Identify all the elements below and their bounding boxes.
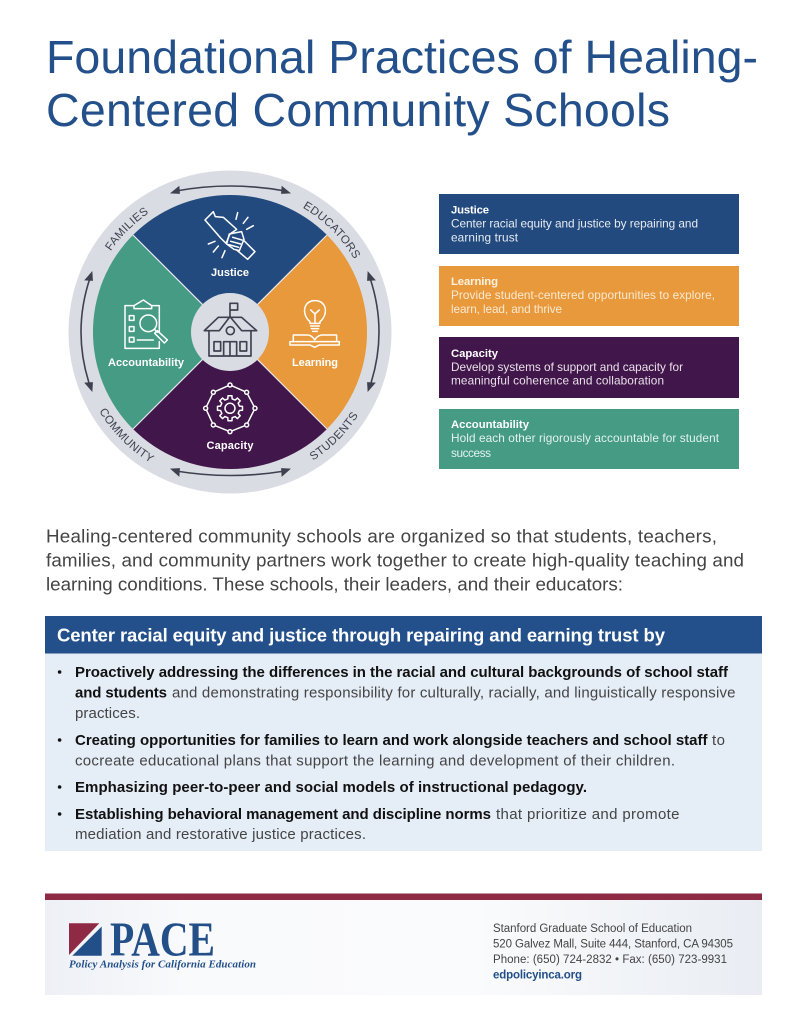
- segment separators: [133, 235, 327, 429]
- contact block: 520 Galvez Mall, Suite 444, Stanford, CA 94305: [493, 938, 733, 950]
- section header: [45, 616, 762, 654]
- title: [46, 31, 758, 136]
- title: Foundational Practices of Healing-: [46, 31, 758, 83]
- panel: Justice: Justice: [451, 204, 489, 216]
- bullet 1: and students: [75, 685, 167, 702]
- bullet 1: and demonstrating responsibility for culturally, racially, and linguistically responsive: [172, 685, 736, 702]
- bullet 2: cocreate educational plans that support the learning and development of their children.: [75, 753, 675, 770]
- contact block: Stanford Graduate School of Education: [493, 923, 692, 935]
- contact block: edpolicyinca.org: [493, 970, 582, 982]
- icon: school: [204, 303, 257, 356]
- ring label: Families: FAMILIES: [104, 208, 148, 250]
- bullet 1: Proactively addressing the differences in the racial and cultural backgrounds of school staff: [75, 664, 729, 681]
- icon: gear network: [204, 383, 257, 434]
- panel: Justice: [439, 194, 739, 254]
- title: Centered Community Schools: [46, 84, 670, 136]
- bullet 1: practices.: [75, 705, 140, 722]
- bullet 4: that prioritize and promote: [496, 806, 680, 823]
- wheel diagram: [68, 170, 392, 494]
- intro text: [46, 526, 744, 595]
- panel: Capacity: meaningful coherence and collaboration: [451, 374, 664, 388]
- panel: Learning: learn, lead, and thrive: [451, 302, 562, 316]
- logo: PACE: Policy Analysis for California Education: [69, 958, 256, 970]
- panel: Capacity: [439, 337, 739, 398]
- panel: Accountability: [439, 409, 739, 469]
- section header: Center racial equity and justice through repairing and earning trust by: [57, 625, 666, 646]
- contact block: Phone: (650) 724-2832 • Fax: (650) 723-9931: [493, 954, 727, 966]
- footer: [45, 894, 762, 995]
- contact block: [493, 923, 733, 982]
- intro text: Healing-centered community schools are organized so that students, teachers,: [46, 526, 717, 547]
- logo: PACE: PACE: [110, 912, 215, 967]
- intro text: learning conditions. These schools, their leaders, and their educators:: [46, 574, 623, 595]
- panel: Capacity: Capacity: [451, 348, 499, 360]
- bullet 4: mediation and restorative justice practices.: [75, 826, 366, 843]
- bullet 2: [58, 732, 725, 770]
- panel: Learning: [439, 266, 739, 326]
- icon: clipboard and magnifier: [125, 300, 167, 348]
- label: Capacity: Capacity: [206, 440, 254, 452]
- center hub: [191, 293, 269, 371]
- panel: Accountability: Hold each other rigorously accountable for student: [451, 431, 720, 445]
- bullet 1: [58, 664, 736, 722]
- panel: Learning: Learning: [451, 276, 498, 288]
- segment: Capacity: [133, 332, 327, 469]
- segment: Learning: [230, 235, 367, 429]
- label: Justice: Justice: [211, 267, 249, 279]
- panel: Accountability: success: [451, 446, 491, 460]
- bullet 4: Establishing behavioral management and discipline norms: [75, 806, 491, 823]
- panel: Justice: earning trust: [451, 230, 519, 244]
- ring label: Educators: EDUCATORS: [303, 201, 360, 258]
- panel: Justice: Center racial equity and justice by repairing and: [451, 216, 698, 230]
- panel: bullet list: [45, 654, 762, 851]
- arrow: right: [368, 272, 379, 391]
- panel: Accountability: Accountability: [451, 419, 530, 431]
- outer ring: [68, 170, 392, 494]
- panel: Learning: Provide student-centered opportunities to explore,: [451, 288, 715, 302]
- bullet 4: [58, 806, 680, 843]
- bullet 2: Creating opportunities for families to learn and work alongside teachers and school staff: [75, 732, 708, 749]
- ring label: Students: STUDENTS: [310, 412, 358, 460]
- segment: Accountability: [93, 235, 230, 429]
- arrow: top: [171, 186, 290, 194]
- panel: Capacity: Develop systems of support and capacity for: [451, 360, 683, 374]
- intro text: families, and community partners work together to create high-quality teaching and: [46, 550, 744, 571]
- logo mark: [69, 923, 102, 956]
- arrow: bottom: [171, 468, 290, 476]
- label: Accountability: Accountability: [108, 357, 185, 369]
- bullet 2: to: [712, 732, 725, 749]
- icon: lightbulb and book: [290, 301, 339, 347]
- logo: PACE: [69, 912, 256, 970]
- segment: Justice: [133, 195, 327, 332]
- arrow: left: [81, 272, 92, 391]
- ring label: Community: COMMUNITY: [100, 408, 154, 462]
- icon: handshake fist: [205, 212, 255, 259]
- label: Learning: Learning: [292, 357, 338, 369]
- bullet 3: Emphasizing peer-to-peer and social models of instructional pedagogy.: [75, 779, 587, 796]
